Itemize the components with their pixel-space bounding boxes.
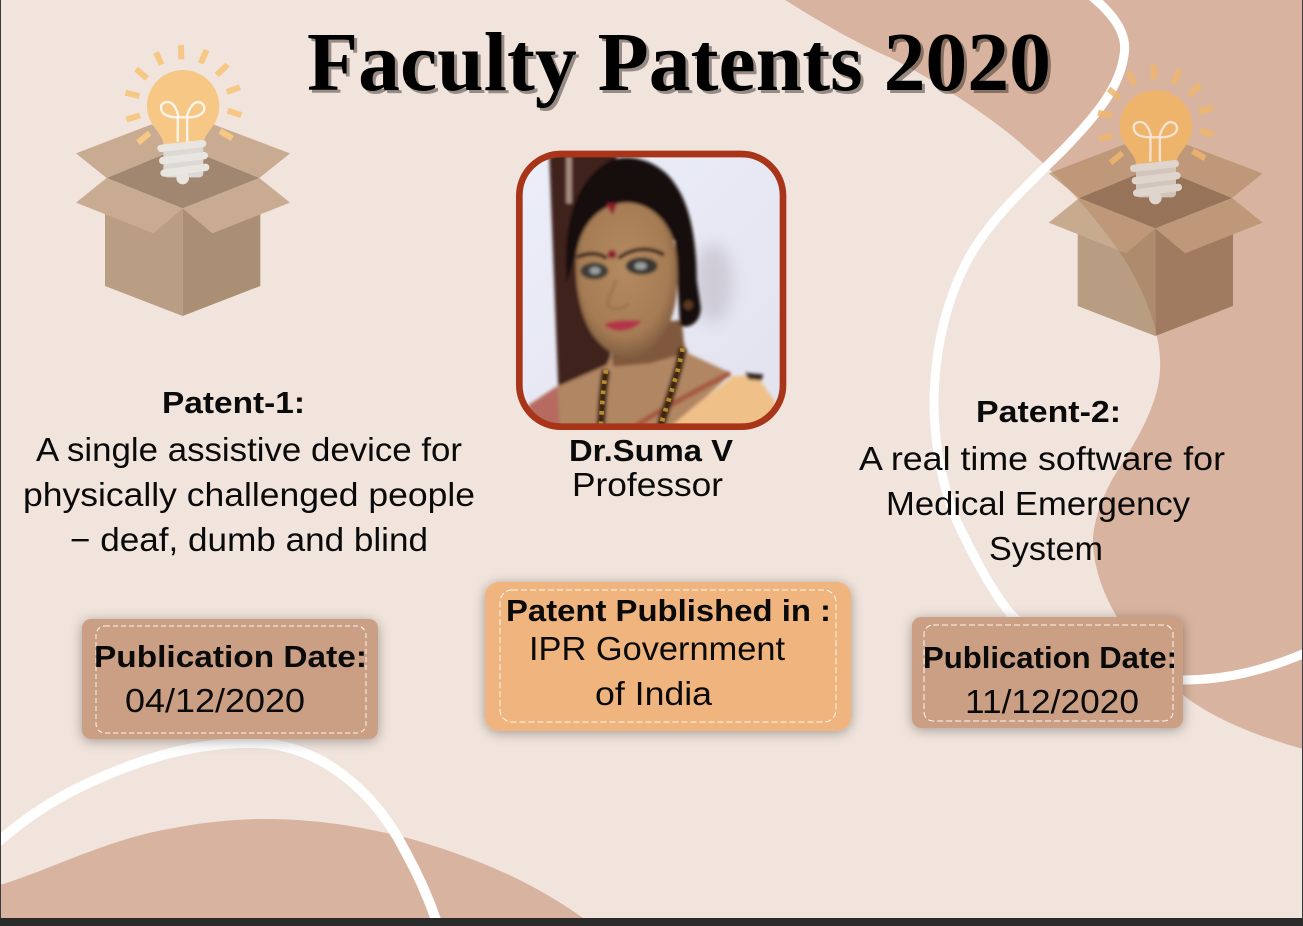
patent published in card: IPR Government: [529, 630, 785, 667]
light bulb: [1098, 65, 1214, 204]
patent 2 text: [859, 394, 1225, 567]
box back flaps and interior: [1049, 144, 1263, 228]
light bulb: [125, 45, 241, 184]
title: Faculty Patents 2020: [307, 16, 1051, 109]
patent 2 text: Patent-2:: [976, 394, 1121, 429]
publication date card 2: Publication Date:: [923, 640, 1177, 675]
name and role: Professor: [572, 466, 723, 503]
publication date card 1: Publication Date:: [94, 639, 367, 674]
red rounded frame: [519, 154, 783, 427]
patent published in card: Patent Published in :: [506, 593, 831, 628]
patent 1 text: [23, 385, 475, 558]
box back flaps and interior: [76, 124, 290, 208]
patent published in card: [485, 582, 851, 731]
patent 1 text: physically challenged people: [23, 476, 475, 513]
patent 1 text: − deaf, dumb and blind: [70, 521, 428, 558]
patent 2 text: A real time software for: [859, 440, 1225, 477]
patent 1 text: A single assistive device for: [36, 431, 462, 468]
icon: right box with light bulb: [1049, 65, 1263, 336]
patent 2 text: System: [989, 530, 1103, 567]
icon: left box with light bulb: [76, 45, 290, 316]
box front: [1049, 198, 1263, 336]
portrait photo with frame: [513, 150, 790, 433]
publication date card 1: 04/12/2020: [125, 682, 305, 719]
publication date card 2: 11/12/2020: [965, 683, 1139, 720]
publication date card 1: [82, 619, 378, 739]
patent 1 text: Patent-1:: [162, 385, 305, 420]
patent published in card: of India: [595, 675, 713, 712]
photo illustration: [522, 157, 780, 424]
patent 2 text: Medical Emergency: [886, 485, 1191, 522]
name and role: [569, 433, 733, 503]
box front: [76, 178, 290, 316]
publication date card 2: [912, 617, 1183, 728]
name and role: Dr.Suma V: [569, 433, 733, 468]
